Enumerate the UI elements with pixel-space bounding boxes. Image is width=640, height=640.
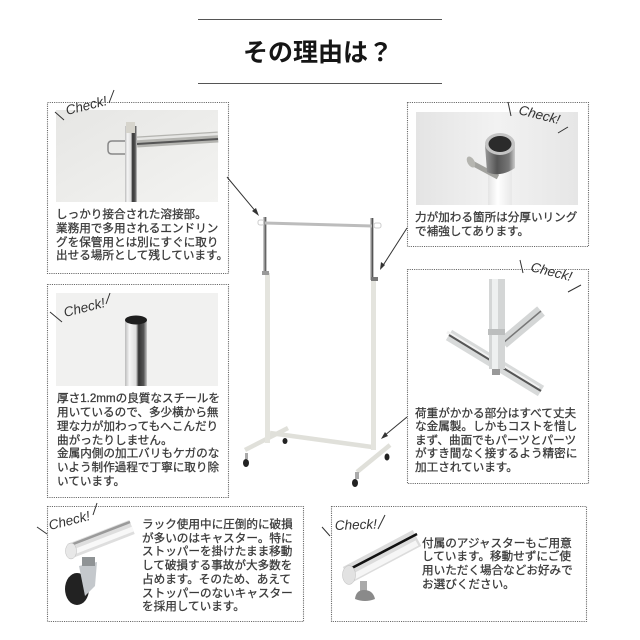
label: check: Check! (517, 102, 562, 127)
text: welded joint: しっかり接合された溶接部。 (56, 208, 207, 221)
text: welded joint: グを保管用とは別にすぐに取り (56, 235, 218, 249)
panel: welded joint (48, 90, 228, 274)
photo: caster (65, 522, 133, 605)
panel: adjuster (322, 506, 586, 622)
panel: thick steel tube (48, 284, 228, 498)
photo: welded joint (56, 110, 218, 202)
text: casters: 占めます。そのため、あえて (142, 572, 291, 586)
label: check: Check! (529, 259, 574, 284)
label: check (520, 259, 581, 292)
label: check: Check! (335, 517, 377, 533)
label: check (50, 293, 110, 322)
text: adjuster: 付属のアジャスターもご用意 (422, 536, 572, 550)
title: その理由は？ (243, 39, 393, 67)
arrow: to metal parts (381, 417, 407, 439)
photo: metal joint (447, 279, 541, 391)
text: casters: ストッパーを掛けたまま移動 (142, 544, 292, 558)
text: metal parts: まず、曲面でもパーツとパーツ (415, 434, 576, 447)
text: metal parts: がすき間なく接するよう精密に (415, 446, 577, 460)
text: adjuster: お選びください。 (422, 578, 515, 591)
text: casters: ストッパーのないキャスター (142, 587, 293, 600)
text: metal parts: な金属製。しかもコストを惜し (415, 419, 577, 433)
label: check: Check! (62, 295, 107, 320)
photo: adjuster (342, 534, 417, 601)
text: steel tube: 曲がったりしません。 (57, 433, 173, 447)
text: steel tube: 厚さ1.2mmの良質なスチールを (57, 391, 220, 405)
label: check: Check! (64, 93, 109, 118)
text: metal parts: 荷重がかかる部分はすべて丈夫 (415, 406, 576, 420)
text: metal parts: 加工されています。 (415, 461, 518, 474)
text: casters: ラック使用中に圧倒的に破損 (142, 517, 293, 531)
label: check (55, 90, 114, 120)
text: adjuster: しています。移動せずにご使 (422, 549, 571, 563)
text: casters: が多いのはキャスター。特に (142, 531, 293, 545)
panel: casters (37, 503, 304, 622)
arrow: to welded joint (227, 177, 259, 216)
text: casters: して破損する事故が大多数を (142, 558, 292, 572)
text: welded joint: 業務用で多用されるエンドリン (56, 221, 218, 235)
photo: steel tube (56, 293, 218, 386)
panel: metal parts (408, 259, 588, 484)
text: steel tube: いています。 (57, 475, 125, 488)
text: welded joint: 出せる場所として残しています。 (56, 248, 228, 262)
text: steel tube: 理な力が加わってもへこんだり (57, 419, 218, 433)
photo: reinforcing ring (416, 112, 578, 205)
text: steel tube: 金属内側の加工バリもケガのな (57, 446, 219, 460)
label: check (508, 102, 568, 133)
arrow: to reinforcing ring (380, 228, 407, 270)
label: check: Check! (47, 508, 92, 533)
text: casters: を採用しています。 (142, 600, 245, 613)
label: check (322, 515, 385, 536)
text: adjuster: 用いただく場合などお好みで (422, 563, 573, 577)
text: reinforcing ring: 力が加わる箇所は分厚いリング (415, 210, 578, 224)
text: steel tube: 用いているので、多少横から無 (57, 405, 219, 419)
clothes rack product image (243, 217, 390, 487)
panel: reinforcing ring (408, 102, 588, 246)
text: reinforcing ring: で補強してあります。 (415, 225, 529, 238)
label: check (37, 503, 97, 534)
text: steel tube: いよう制作過程で丁寧に取り除 (57, 460, 219, 474)
